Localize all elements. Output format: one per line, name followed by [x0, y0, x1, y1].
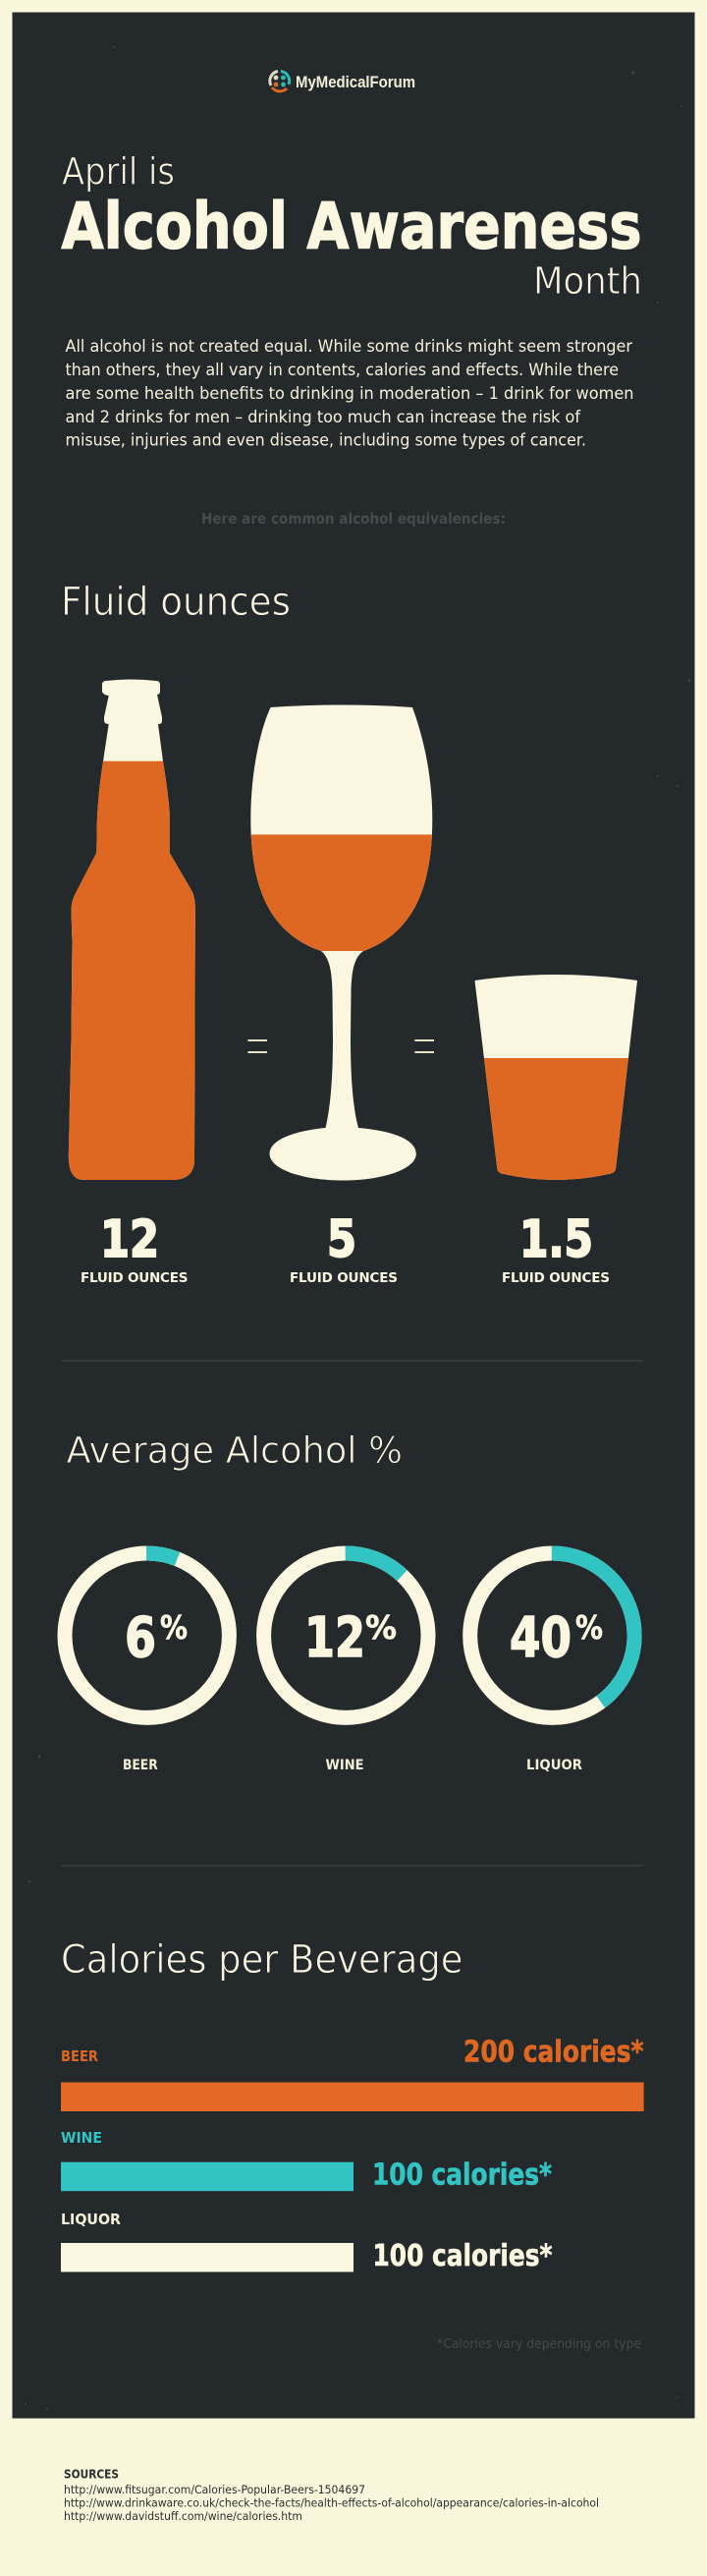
ounces: 1.5: 1.5 — [519, 1210, 593, 1269]
ounces: 1.5 — [502, 1210, 610, 1286]
donut chart: liquor 40% — [470, 1553, 634, 1773]
bar: liquor: 100 calories* — [373, 2239, 553, 2273]
icon: equals sign — [247, 1040, 267, 1052]
icon: logo mark — [270, 71, 290, 91]
heading: Average Alcohol %: Average Alcohol % — [67, 1429, 403, 1472]
intro paragraph: and 2 drinks for men – drinking too much can increase the risk of — [65, 408, 581, 426]
heading: Fluid ounces: Fluid ounces — [61, 580, 291, 625]
donut chart: wine 12% — [264, 1553, 428, 1773]
sources: http://www.drinkaware.co.uk/check-the-facts/health-effects-of-alcohol/appearance/calories-in-alcohol — [64, 2495, 599, 2509]
sources — [64, 2466, 599, 2523]
intro paragraph: are some health benefits to drinking in moderation – 1 drink for women — [65, 384, 634, 403]
icon: liquor glass — [475, 975, 637, 1180]
title line: April is: April is — [62, 149, 175, 193]
bar: liquor — [61, 2211, 553, 2273]
bar: beer — [61, 2035, 644, 2111]
title — [61, 149, 642, 303]
bar: beer: BEER — [61, 2047, 98, 2065]
icon: wine glass — [250, 705, 432, 1181]
subheading: equivalencies: Here are common alcohol equivalencies: — [201, 510, 506, 528]
donut chart: wine 12%: % — [365, 1608, 397, 1647]
donut chart: wine 12%: 12 — [304, 1606, 365, 1670]
donut chart: beer 6%: % — [160, 1608, 188, 1647]
bar: beer: 200 calories* — [463, 2035, 644, 2069]
ounces: 1.5: FLUID OUNCES — [502, 1270, 610, 1286]
ounces: 5: 5 — [327, 1210, 356, 1269]
donut chart: beer 6% — [65, 1553, 229, 1773]
logo wordmark: MyMedicalForum — [296, 73, 415, 91]
donut chart: wine 12%: WINE — [326, 1758, 363, 1773]
intro paragraph: misuse, injuries and even disease, including some types of cancer. — [65, 430, 586, 450]
heading: Calories per Beverage: Calories per Beverage — [61, 1937, 463, 1983]
ounces: 12: 12 — [100, 1210, 159, 1269]
icon: beer bottle — [69, 680, 195, 1180]
sources: SOURCES — [64, 2466, 119, 2482]
ounces: 12: FLUID OUNCES — [81, 1270, 189, 1286]
intro paragraph: All alcohol is not created equal. While some drinks might seem stronger — [65, 337, 632, 356]
sources: http://www.fitsugar.com/Calories-Popular-Beers-1504697 — [64, 2483, 365, 2496]
donut chart: beer 6%: 6 — [125, 1606, 156, 1670]
bar: wine: 100 calories* — [372, 2158, 552, 2193]
logo: MyMedicalForum — [270, 71, 415, 91]
ounces: 12 — [81, 1210, 189, 1286]
ounces: 5 — [290, 1210, 398, 1286]
footnote: *Calories vary depending on type — [437, 2336, 641, 2352]
ounces: 5: FLUID OUNCES — [290, 1270, 398, 1286]
title line: Month: Month — [533, 259, 642, 303]
donut chart: liquor 40%: 40 — [510, 1606, 571, 1670]
donut chart: liquor 40%: LIQUOR — [526, 1758, 582, 1773]
bar: wine: WINE — [61, 2129, 102, 2147]
bar: wine — [61, 2129, 552, 2193]
intro paragraph — [65, 337, 634, 450]
icon: equals sign — [414, 1040, 434, 1052]
donut chart: beer 6%: BEER — [123, 1758, 158, 1773]
sources: http://www.davidstuff.com/wine/calories.htm — [64, 2509, 302, 2523]
donut chart: liquor 40%: % — [575, 1608, 603, 1647]
intro paragraph: than others, they all vary in contents, calories and effects. While there — [65, 361, 619, 379]
bar: liquor: LIQUOR — [61, 2211, 121, 2228]
